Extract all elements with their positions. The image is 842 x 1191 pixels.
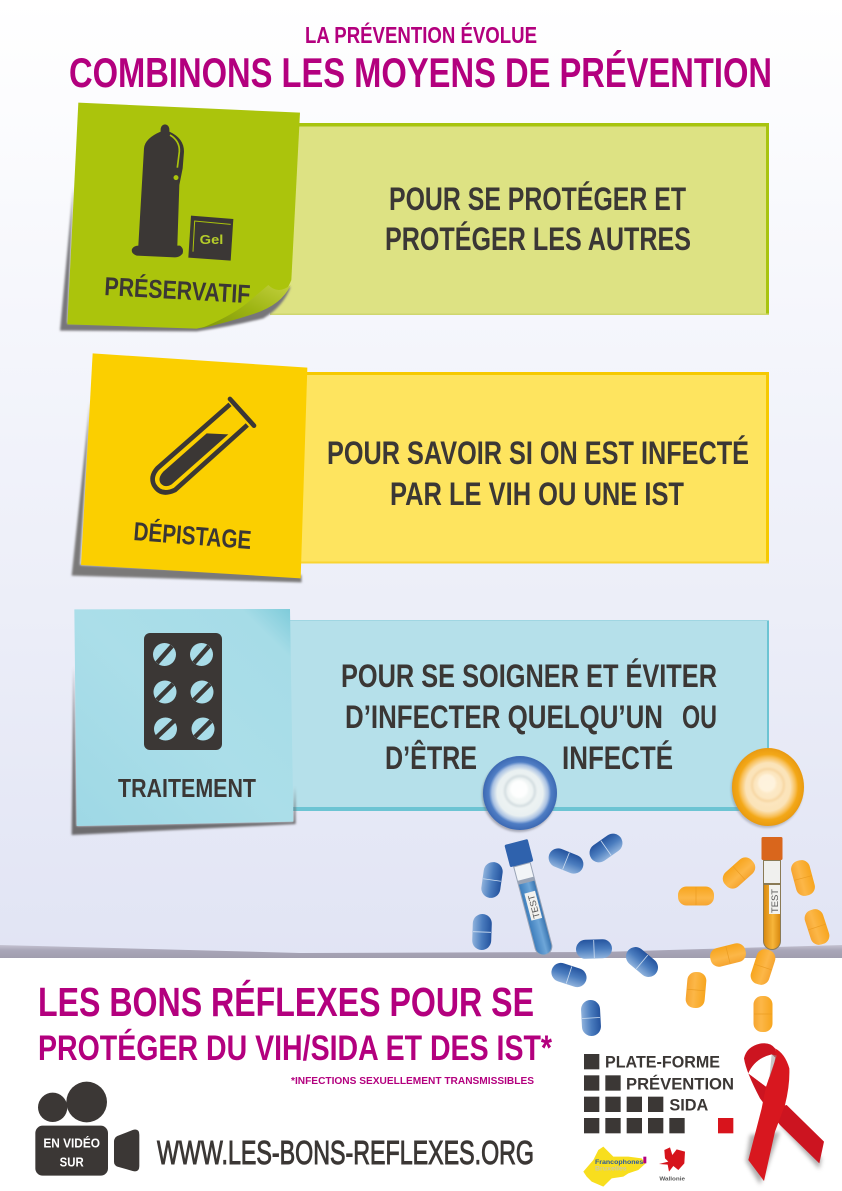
- footnote: *INFECTIONS SEXUELLEMENT TRANSMISSIBLES: [291, 1076, 534, 1087]
- illustration: orange pills: [678, 854, 832, 1032]
- logo: plate-forme prévention sida: SIDA: [669, 1096, 708, 1115]
- message: dépistage: PAR LE VIH OU UNE IST: [390, 476, 684, 512]
- message: traitement: POUR SE SOIGNER ET ÉVITER: [341, 658, 717, 694]
- title: LA PRÉVENTION ÉVOLUE: [305, 21, 537, 48]
- website url: WWW.LES-BONS-REFLEXES.ORG: [157, 1134, 534, 1171]
- logo: wallonie: Wallonie: [659, 1177, 685, 1183]
- shelf edge: [0, 945, 842, 958]
- message: traitement: D’ÊTRE: [385, 740, 477, 776]
- sticky note: traitement: [72, 609, 296, 835]
- illustration: blue test tube: [504, 839, 557, 958]
- label: dépistage: DÉPISTAGE: [133, 516, 252, 555]
- icon: condom: [132, 124, 184, 257]
- illustration: orange condom: [731, 748, 804, 828]
- label: préservatif: PRÉSERVATIF: [104, 271, 251, 309]
- title: [69, 21, 772, 96]
- icon: gel sachet: [188, 216, 233, 261]
- white footer band: [0, 958, 842, 1191]
- illustration: blue pills: [472, 830, 662, 1036]
- label: traitement: TRAITEMENT: [118, 773, 256, 803]
- icon: test tube: [153, 399, 254, 492]
- icon: red ribbon: [744, 1043, 824, 1184]
- icon: gel sachet: Gel: [200, 233, 223, 247]
- logo: plate-forme prévention sida: PRÉVENTION: [626, 1074, 734, 1093]
- message: traitement: INFECTÉ: [562, 740, 673, 776]
- panel: préservatif: [270, 123, 769, 315]
- label: test: TEST: [770, 888, 780, 913]
- logo: plate-forme prévention sida: [584, 1053, 734, 1133]
- sticky note: dépistage: [72, 353, 307, 582]
- icon: video camera: EN VIDÉO: [43, 1135, 100, 1150]
- message: préservatif: [385, 181, 691, 257]
- message: traitement: [341, 658, 717, 776]
- sticky note: préservatif: [60, 103, 300, 331]
- label: test: TEST: [526, 893, 542, 919]
- icon: blister pack: [144, 633, 222, 750]
- illustration: orange test tube: [762, 837, 782, 950]
- message: préservatif: POUR SE PROTÉGER ET: [389, 181, 686, 217]
- message: préservatif: PROTÉGER LES AUTRES: [385, 221, 691, 257]
- icon: video camera: [35, 1082, 139, 1176]
- panel: dépistage: [300, 372, 769, 564]
- message: dépistage: [327, 435, 749, 512]
- logo: francophones bruxelles: Bruxelles: [595, 1166, 627, 1173]
- message: traitement: OU: [682, 699, 717, 735]
- logo: francophones bruxelles: [583, 1147, 646, 1187]
- logo: plate-forme prévention sida: PLATE-FORME: [605, 1053, 720, 1072]
- message: traitement: D’INFECTER QUELQU’UN: [345, 699, 663, 735]
- footer heading: [38, 979, 552, 1087]
- footer heading: PROTÉGER DU VIH/SIDA ET DES IST*: [38, 1028, 552, 1068]
- logo: francophones bruxelles: Francophones: [595, 1159, 644, 1166]
- logo: wallonie: [659, 1147, 685, 1183]
- icon: video camera: SUR: [60, 1155, 84, 1170]
- illustration: blue condom: [482, 756, 557, 832]
- panel: traitement: [290, 620, 769, 811]
- footer heading: LES BONS RÉFLEXES POUR SE: [38, 979, 534, 1025]
